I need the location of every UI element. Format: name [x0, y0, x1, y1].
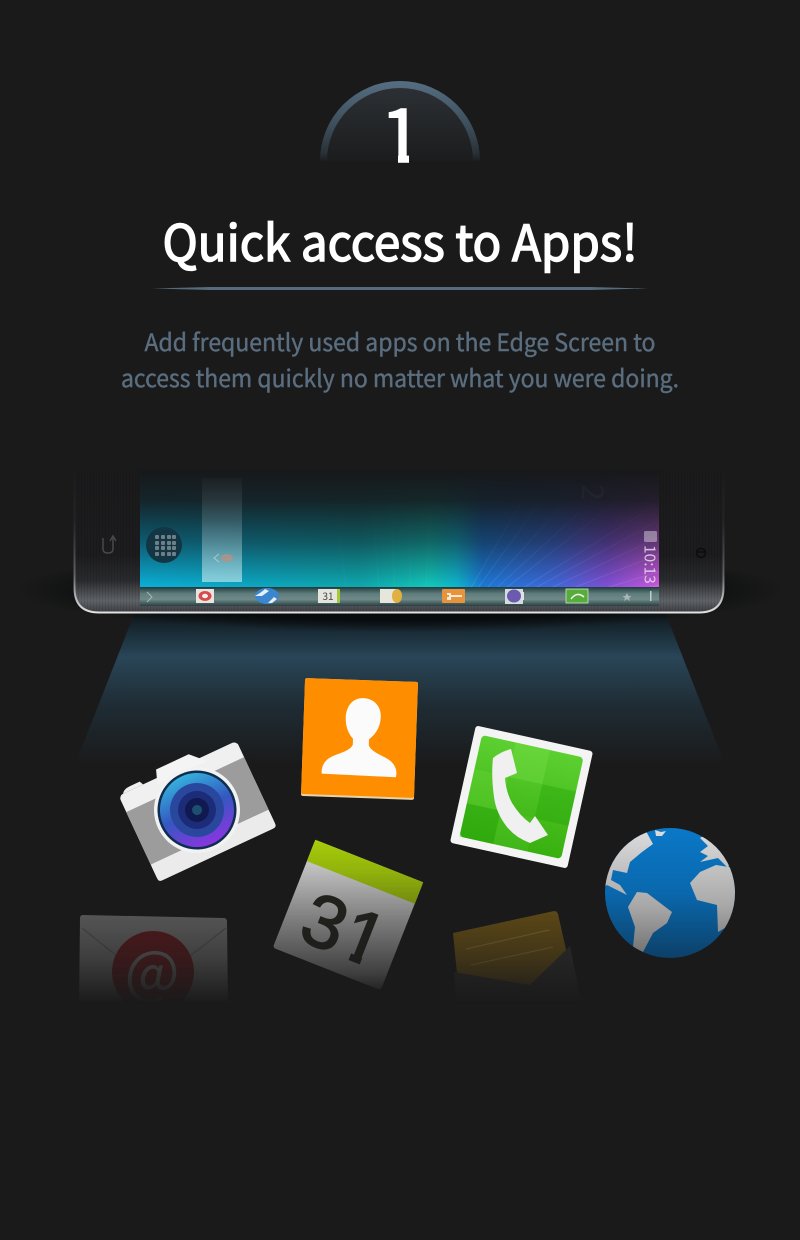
- icon: email: [80, 915, 228, 992]
- description text: access them quickly no matter what you were doing.: [121, 359, 679, 394]
- number badge: [320, 81, 480, 163]
- icon: contacts: [301, 678, 418, 800]
- phone shadow: [15, 548, 785, 632]
- tray app: camera: [505, 589, 524, 604]
- status clock hint: 2: [573, 484, 617, 501]
- edge border line: [74, 470, 724, 612]
- phone body: [74, 470, 724, 613]
- icon: calendar: [273, 840, 423, 990]
- icon: phone: [450, 725, 593, 869]
- tray app: email: [196, 589, 214, 603]
- icon: camera: [115, 734, 277, 882]
- at sign: @: [125, 926, 179, 1010]
- tray handle: [147, 592, 152, 602]
- light beam: [76, 612, 724, 762]
- status bar: 10:13: [640, 545, 662, 584]
- tray app: phone: [566, 589, 588, 603]
- description text: [121, 323, 679, 394]
- description text: Add frequently used apps on the Edge Screen to: [144, 323, 656, 358]
- number 1: 1: [380, 77, 422, 184]
- icon: apps button: [146, 527, 182, 563]
- tray app: calendar: 31: [322, 588, 334, 603]
- tray star: [622, 593, 632, 601]
- translucent side panel: [202, 478, 242, 582]
- phone device: [69, 478, 732, 629]
- tray app: internet: [255, 588, 279, 604]
- icon: front camera: [696, 548, 706, 558]
- contact silhouette: [321, 697, 399, 777]
- continents: [628, 892, 672, 952]
- icon: messages: [453, 911, 574, 985]
- edge screen tray: [140, 587, 659, 606]
- title: Quick access to Apps!: [162, 204, 638, 276]
- icon: back arrow: [103, 536, 116, 553]
- icon: internet globe: [600, 825, 740, 958]
- tray app: calendar: [318, 588, 340, 603]
- tray app: memo: [380, 589, 402, 603]
- calendar date: 31: [290, 875, 399, 984]
- handset: [492, 749, 548, 843]
- screen wallpaper: [140, 482, 659, 587]
- tray app: music: [442, 589, 465, 603]
